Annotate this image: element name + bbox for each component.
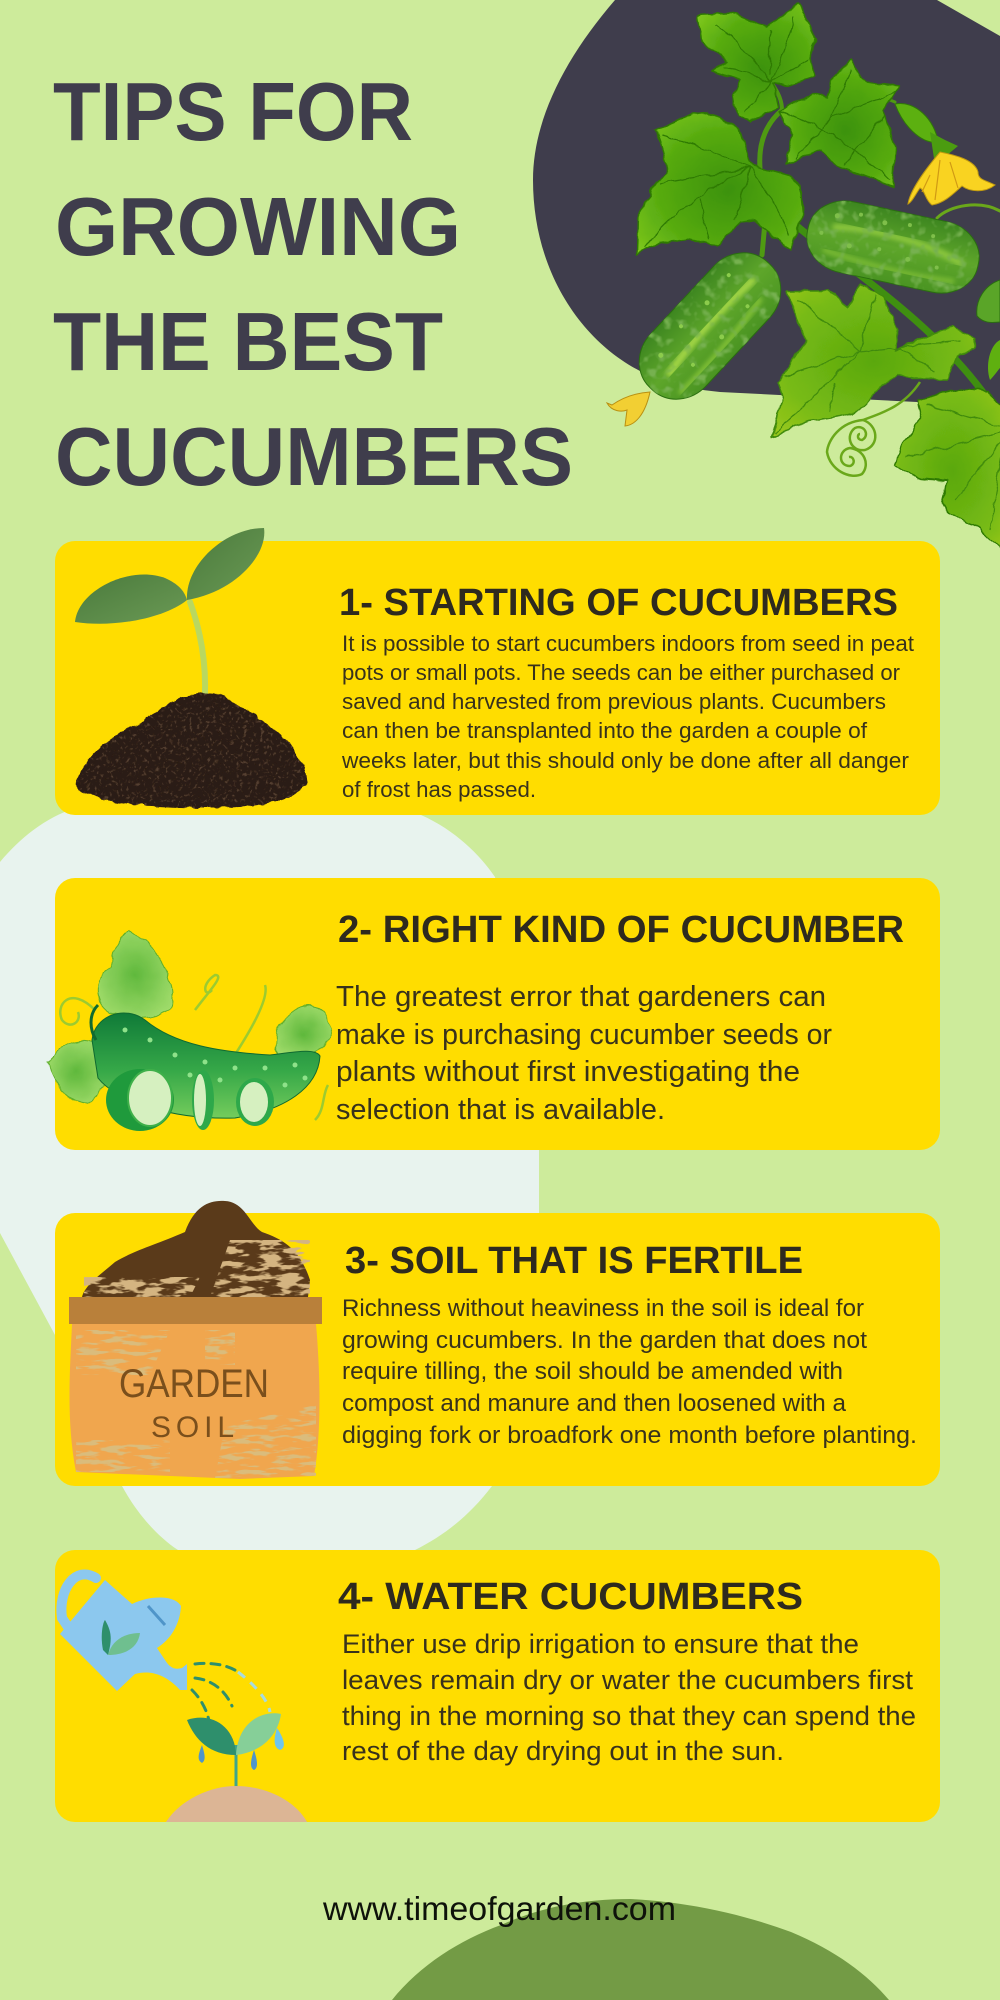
text block [341, 631, 914, 802]
title [53, 65, 573, 503]
heading: 2- RIGHT KIND OF CUCUMBER [338, 909, 904, 951]
text block: growing cucumbers. In the garden that does not [342, 1327, 867, 1354]
text block [342, 1629, 916, 1766]
card background [55, 1550, 940, 1822]
title: THE BEST [53, 295, 443, 388]
leaf: lower middle [772, 284, 975, 436]
text block: It is possible to start cucumbers indoors from seed in peat [342, 631, 914, 656]
text block: Either use drip irrigation to ensure that the [342, 1629, 859, 1659]
text block [342, 1295, 917, 1449]
icon: watering can and sprout [60, 1574, 307, 1822]
text block: saved and harvested from previous plants. Cucumbers [342, 689, 886, 714]
text block: thing in the morning so that they can spend the [342, 1701, 916, 1731]
tendril [827, 382, 920, 476]
leaf: top [698, 4, 815, 121]
heading: 4- WATER CUCUMBERS [338, 1576, 803, 1618]
icon: garden soil bag: GARDEN [119, 1362, 269, 1406]
cucumber: lying [800, 194, 986, 300]
pale blob behind cards [0, 808, 539, 1550]
icon: garden soil bag [69, 1201, 322, 1479]
green blob at bottom [392, 1899, 889, 2000]
title: TIPS FOR [53, 65, 413, 158]
text block: compost and manure and then loosened with a [342, 1390, 846, 1417]
heading: 1- STARTING OF CUCUMBERS [339, 582, 898, 624]
text block: selection that is available. [336, 1094, 665, 1126]
text block: leaves remain dry or water the cucumbers first [342, 1665, 914, 1695]
title: GROWING [55, 180, 461, 273]
heading: 3- SOIL THAT IS FERTILE [345, 1240, 803, 1282]
flower: small [607, 392, 650, 426]
panel: card 3 [55, 1201, 940, 1486]
text block: The greatest error that gardeners can [336, 981, 826, 1013]
panel: card 1 [55, 528, 940, 815]
cucumber: hanging [624, 237, 796, 415]
card background [55, 878, 940, 1150]
stems [760, 84, 1000, 395]
icon: seedling in soil [75, 528, 306, 808]
card background [55, 541, 940, 815]
text block: of frost has passed. [342, 777, 536, 802]
dark blob behind plant [533, 0, 1000, 412]
text block: Richness without heaviness in the soil is ideal for [342, 1295, 864, 1322]
cucumber: small right [977, 280, 1000, 380]
text block: can then be transplanted into the garden a couple of [342, 718, 868, 743]
icon: garden soil bag: SOIL [151, 1411, 234, 1444]
leaf: upper right [780, 61, 900, 187]
text block: digging fork or broadfork one month before planting. [342, 1422, 917, 1449]
leaf: left large [637, 112, 803, 254]
text block: require tilling, the soil should be amended with [342, 1358, 843, 1385]
slices [106, 1069, 274, 1131]
text block: make is purchasing cucumber seeds or [336, 1019, 832, 1051]
text block: plants without first investigating the [336, 1056, 800, 1088]
leaf: bottom right [895, 388, 1000, 556]
title: CUCUMBERS [55, 410, 573, 503]
footer website: www.timeofgarden.com [322, 1890, 676, 1927]
bud [895, 103, 958, 165]
panel: card 2 [47, 878, 940, 1150]
illustration: cucumber plant [607, 4, 1000, 556]
icon: cucumber with slices [47, 930, 333, 1131]
text block: weeks later, but this should only be done after all danger [341, 748, 909, 773]
panel: card 4 [55, 1550, 940, 1822]
pale leaves [47, 930, 333, 1104]
card background [55, 1213, 940, 1486]
text block: rest of the day drying out in the sun. [342, 1736, 784, 1766]
text block: pots or small pots. The seeds can be either purchased or [342, 660, 900, 685]
text block [336, 981, 832, 1126]
flower: top [908, 152, 995, 205]
